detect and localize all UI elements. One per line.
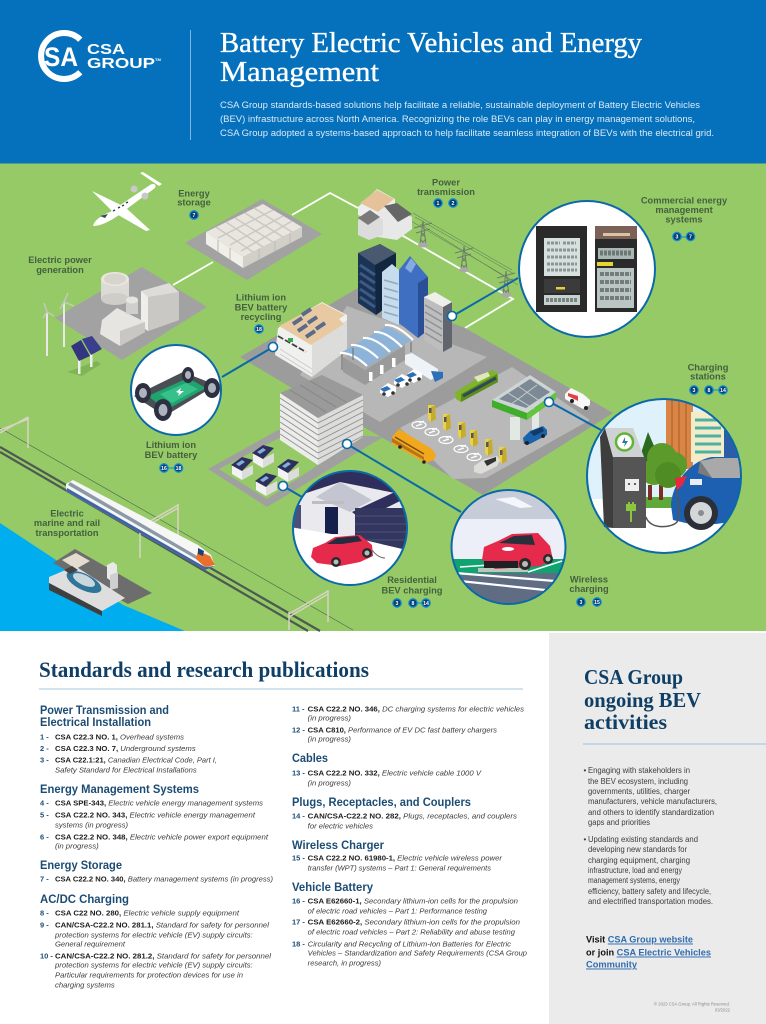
bullet list: the BEV ecosystem, including [588, 777, 688, 786]
parking spots and chargers [412, 405, 507, 464]
section: wireless charger: CSA C22.2 NO. 61980-1, Electric vehicle wireless power [308, 854, 503, 863]
section: power transmission: Electrical Installation [40, 717, 151, 729]
label: residential BEV charging: BEV charging [382, 586, 443, 596]
section: energy management systems: (in progress) [55, 842, 99, 851]
label: residential BEV charging: 3 [396, 601, 399, 607]
section: AC/DC charging: 8 - [40, 909, 49, 918]
section: vehicle battery: Vehicle Battery [292, 882, 374, 894]
silver car [474, 456, 500, 474]
section: energy storage: CSA C22.2 NO. 340, Battery management systems (in progress) [55, 875, 273, 884]
section: AC/DC charging: charging systems [55, 981, 115, 990]
section: energy management systems: Energy Management Systems [40, 784, 199, 796]
label: power transmission: Power [432, 178, 460, 188]
section: AC/DC charging [40, 894, 271, 990]
red car [311, 535, 385, 567]
title [220, 28, 642, 88]
label: electric power generation: Electric power [28, 255, 92, 265]
panel heading [584, 665, 701, 734]
section: AC/DC charging: General requirement [55, 940, 126, 949]
label: lithium ion BEV battery: BEV battery [145, 450, 198, 460]
copyright: © 2023 CSA Group. All Rights Reserved. [654, 1002, 730, 1006]
section: vehicle battery: 16 - [292, 897, 305, 906]
section: energy management systems: 4 - [40, 799, 49, 808]
energy storage pad [185, 199, 322, 280]
panel: standards and research publications [39, 657, 527, 990]
label: energy storage: storage [177, 198, 211, 208]
panel heading: CSA Group [584, 665, 683, 689]
CSA Group logo: GROUP [87, 56, 155, 72]
section: energy storage [40, 860, 273, 884]
section: DC charging continued: CSA C810, Performance of EV DC fast battery chargers [308, 726, 497, 735]
label: electric power generation: generation [36, 265, 84, 275]
electric train [66, 480, 215, 570]
title: Battery Electric Vehicles and Energy [220, 28, 642, 59]
water [0, 523, 185, 631]
section: power transmission: 3 - [40, 756, 49, 765]
label: residential BEV charging: Residential [387, 575, 437, 585]
cabinet left [536, 226, 587, 312]
label: electric marine and rail: Electric [50, 508, 84, 518]
section: power transmission: CSA C22.3 NO. 7, Underground systems [55, 744, 196, 753]
bullet list: manufacturers, vehicle manufacturers, [588, 797, 717, 806]
label: wireless charging: 3 [580, 600, 583, 606]
power lines (white) [173, 193, 513, 328]
section: DC charging continued: (in progress) [308, 735, 352, 744]
label: wireless charging: charging [569, 584, 609, 594]
label: residential BEV charging: 8 [412, 601, 415, 607]
detail circle: commercial energy management [519, 201, 655, 337]
section: energy storage: Energy Storage [40, 860, 122, 872]
section: AC/DC charging: protection systems for electric vehicle (EV) supply circuits: [54, 961, 253, 970]
parking garage [280, 375, 363, 465]
label: commercial energy management systems: 3 [676, 234, 679, 240]
section: AC/DC charging: AC/DC Charging [40, 894, 129, 906]
label: wireless charging: Wireless [570, 574, 608, 584]
detail circle: wireless charging [451, 489, 566, 605]
delivery truck and fleet vans [380, 353, 443, 397]
section: vehicle battery: CSA E62660-2, Secondary lithium-ion cells for the propulsion [308, 918, 520, 927]
label: charging stations: 14 [720, 388, 726, 394]
label: battery recycling: Lithium ion [236, 292, 286, 302]
panel: CSA Group ongoing BEV activities [549, 633, 766, 1024]
label: power transmission: 2 [452, 201, 455, 207]
label: wireless charging: 15 [594, 600, 600, 606]
detail circle: residential charging [292, 470, 408, 586]
label: energy storage [177, 188, 211, 219]
cabinet right [595, 226, 637, 312]
charging cable and plug [646, 476, 687, 527]
section: energy management systems: systems (in progress) [55, 821, 129, 830]
bullet list: charging equipment, charging [588, 856, 690, 865]
section: energy management systems: CSA C22.2 NO. 343, Electric vehicle energy management [55, 811, 256, 820]
label: energy storage: Energy [178, 188, 211, 198]
copyright [654, 1002, 731, 1012]
section: vehicle battery [292, 882, 527, 968]
detail circle: charging station [587, 399, 745, 553]
bullet list: Updating existing standards and [588, 835, 698, 844]
section: plugs, receptacles, couplers: for electric vehicles [308, 822, 373, 831]
ferry terminal [49, 549, 152, 616]
call to action links: Visit CSA Group website [586, 934, 693, 946]
label: power transmission [417, 178, 475, 207]
label: commercial energy management systems [641, 196, 728, 241]
ambulance [565, 388, 590, 410]
electric power generation plant [55, 267, 207, 360]
label: commercial energy management systems: management [655, 205, 713, 215]
detail circle: battery chassis [131, 345, 221, 435]
solar panels [67, 336, 102, 376]
section: DC charging continued: 11 - [292, 705, 305, 714]
blue car at station [523, 426, 547, 445]
section: vehicle battery: 17 - [292, 918, 305, 927]
section: vehicle battery: of electric road vehicles – Part 2: Reliability and abuse testing [308, 928, 516, 937]
illustration map [0, 164, 766, 631]
main city pad [240, 288, 613, 495]
yellow school bus [392, 429, 436, 464]
label: battery recycling: recycling [241, 312, 282, 322]
CSA Group logo [41, 33, 161, 79]
section: vehicle battery: of electric road vehicles – Part 1: Performance testing [308, 907, 488, 916]
section: power transmission: CSA C22.3 NO. 1, Overhead systems [55, 733, 184, 742]
call to action links: or join CSA Electric Vehicles [586, 948, 711, 958]
CSA Group logo: CSA [87, 42, 126, 58]
bullet list: Engaging with stakeholders in [588, 766, 690, 775]
blue car charging [671, 457, 745, 530]
label: charging stations: Charging [688, 362, 729, 372]
green bus [455, 370, 498, 402]
residential pad [208, 430, 383, 507]
section: cables: 13 - [292, 769, 305, 778]
section: power transmission: 1 - [40, 733, 49, 742]
bullet list: efficiency, battery safety and lifecycle, [588, 887, 711, 896]
section: DC charging continued: (in progress) [308, 714, 352, 723]
bullet list: gaps and priorities [588, 818, 650, 827]
houses [231, 445, 299, 496]
section: AC/DC charging: CSA C22 NO. 280, Electric vehicle supply equipment [55, 909, 240, 918]
label: electric marine and rail: transportation [35, 528, 99, 538]
section: vehicle battery: research, in progress) [308, 959, 381, 968]
section: DC charging continued: CSA C22.2 NO. 346, DC charging systems for electric vehicles [308, 705, 524, 714]
title: Management [220, 57, 379, 88]
section: vehicle battery: CSA E62660-1, Secondary lithium-ion cells for the propulsion [308, 897, 518, 906]
section: power transmission: 2 - [40, 744, 49, 753]
bullet list: and electrified transportation modes. [588, 897, 713, 906]
call to action links: Community [586, 960, 638, 970]
section: cables: CSA C22.2 NO. 332, Electric vehicle cable 1000 V [308, 769, 482, 778]
section: AC/DC charging: CAN/CSA-C22.2 NO. 281.1, Standard for safety for personnel [55, 921, 269, 930]
section: power transmission: Safety Standard for Electrical Installations [55, 766, 197, 775]
section: power transmission: CSA C22.1:21, Canadian Electrical Code, Part I, [55, 756, 217, 765]
substation [358, 189, 412, 240]
label: charging stations: stations [690, 372, 726, 382]
section: energy management systems: 6 - [40, 833, 49, 842]
label: wireless charging [569, 574, 609, 606]
connector end dots [268, 312, 554, 490]
section: vehicle battery: Circularity and Recycling of Lithium-Ion Batteries for Electric [308, 940, 511, 949]
section: plugs, receptacles, couplers: Plugs, Receptacles, and Couplers [292, 797, 471, 809]
office towers [358, 244, 452, 352]
section: energy management systems [40, 784, 269, 851]
section: wireless charger: Wireless Charger [292, 840, 385, 852]
section: vehicle battery: 18 - [292, 940, 305, 949]
label: lithium ion BEV battery [145, 440, 198, 472]
section: AC/DC charging: protection systems for electric vehicle (EV) supply circuits: [54, 931, 253, 940]
section: plugs, receptacles, couplers [292, 797, 517, 831]
section: energy management systems: CSA C22.2 NO. 348, Electric vehicle power export equipment [55, 833, 269, 842]
plane [92, 172, 162, 231]
label: power transmission: transmission [417, 187, 475, 197]
bullet list: infrastructure, load and energy [588, 866, 682, 875]
section: energy management systems: CSA SPE-343, Electric vehicle energy management systems [55, 799, 263, 808]
section: DC charging continued: 12 - [292, 726, 305, 735]
label: residential BEV charging [382, 575, 443, 607]
section: energy management systems: 5 - [40, 811, 49, 820]
transmission pylons and wires [411, 213, 518, 298]
intro paragraph: CSA Group adopted a systems-based approach to help facilitate seamless integration of BEVs with the electrical grid. [220, 128, 714, 138]
charger post [600, 428, 646, 528]
section: plugs, receptacles, couplers: 14 - [292, 812, 305, 821]
label: lithium ion BEV battery: 16 [161, 466, 167, 472]
label: power transmission: 1 [437, 201, 440, 207]
label: residential BEV charging: 14 [423, 601, 429, 607]
bullet list [584, 766, 717, 906]
section: wireless charger [292, 840, 503, 873]
section: power transmission: Power Transmission and [40, 705, 169, 717]
section: AC/DC charging: 10 - [40, 952, 53, 961]
bullet list: and others to identify standardization [588, 808, 714, 817]
rail line [0, 417, 353, 631]
intro paragraph: CSA Group standards-based solutions help facilitate a reliable, sustainable deployment of Battery Electric Vehicles [220, 100, 700, 110]
CSA Group logo: SA [44, 42, 78, 72]
trees [640, 432, 687, 500]
section: power transmission [40, 705, 217, 775]
header banner [0, 0, 766, 164]
heading: standards: Standards and research publications [39, 657, 369, 682]
label: battery recycling [235, 292, 288, 333]
label: battery recycling: 18 [256, 327, 262, 333]
wind turbines [43, 293, 74, 356]
section: AC/DC charging: Particular requirements for protection devices for use in [55, 971, 243, 980]
recycling building [275, 302, 347, 377]
panel heading: activities [584, 710, 667, 734]
label: electric marine and rail [34, 508, 100, 538]
bullet list: • [584, 766, 586, 775]
section: cables [292, 753, 482, 788]
EV charging canopy [340, 325, 413, 385]
label: lithium ion BEV battery: Lithium ion [146, 440, 196, 450]
label: charging stations [688, 362, 729, 394]
section: vehicle battery: Vehicles – Standardization and Safety Requirements (CSA Group [308, 949, 527, 958]
label: charging stations: 3 [693, 388, 696, 394]
section: wireless charger: transfer (WPT) systems – Part 1: General requirements [308, 864, 491, 873]
bullet list: • [584, 835, 586, 844]
label: commercial energy management systems: systems [665, 214, 703, 224]
intro paragraph: (BEV) infrastructure across North America. Recognizing the role BEVs can play in energy management solutions, [220, 114, 695, 124]
section: energy storage: 7 - [40, 875, 49, 884]
CSA Group logo: TM [155, 57, 161, 62]
label: commercial energy management systems: Commercial energy [641, 196, 728, 206]
call to action links [586, 934, 711, 970]
label: electric marine and rail: marine and rail [34, 518, 100, 528]
charging station canopy [492, 375, 556, 440]
section: plugs, receptacles, couplers: CAN/CSA-C22.2 NO. 282, Plugs, receptacles, and couplers [308, 812, 517, 821]
section: cables: Cables [292, 753, 328, 765]
bullet list: governments, utilities, charger [588, 787, 690, 796]
bullet list: management systems, energy [588, 876, 680, 885]
label: electric power generation [28, 255, 92, 275]
red car [482, 533, 553, 570]
label: commercial energy management systems: 7 [689, 234, 692, 240]
panel heading: ongoing BEV [584, 688, 701, 712]
section: cables: (in progress) [308, 779, 352, 788]
section: AC/DC charging: 9 - [40, 921, 49, 930]
label: lithium ion BEV battery: 18 [176, 466, 181, 472]
section: DC charging continued [292, 705, 524, 744]
bullet list: developing new standards for [588, 845, 687, 854]
label: battery recycling: BEV battery [235, 302, 288, 312]
section: AC/DC charging: CAN/CSA-C22.2 NO. 281.2, Standard for safety for personnel [55, 952, 271, 961]
label: energy storage: 7 [193, 213, 196, 219]
intro paragraph [220, 100, 714, 138]
connector lines [222, 278, 601, 512]
label: charging stations: 8 [708, 388, 711, 394]
section: wireless charger: 15 - [292, 854, 305, 863]
copyright: 03/2022 [715, 1008, 731, 1012]
